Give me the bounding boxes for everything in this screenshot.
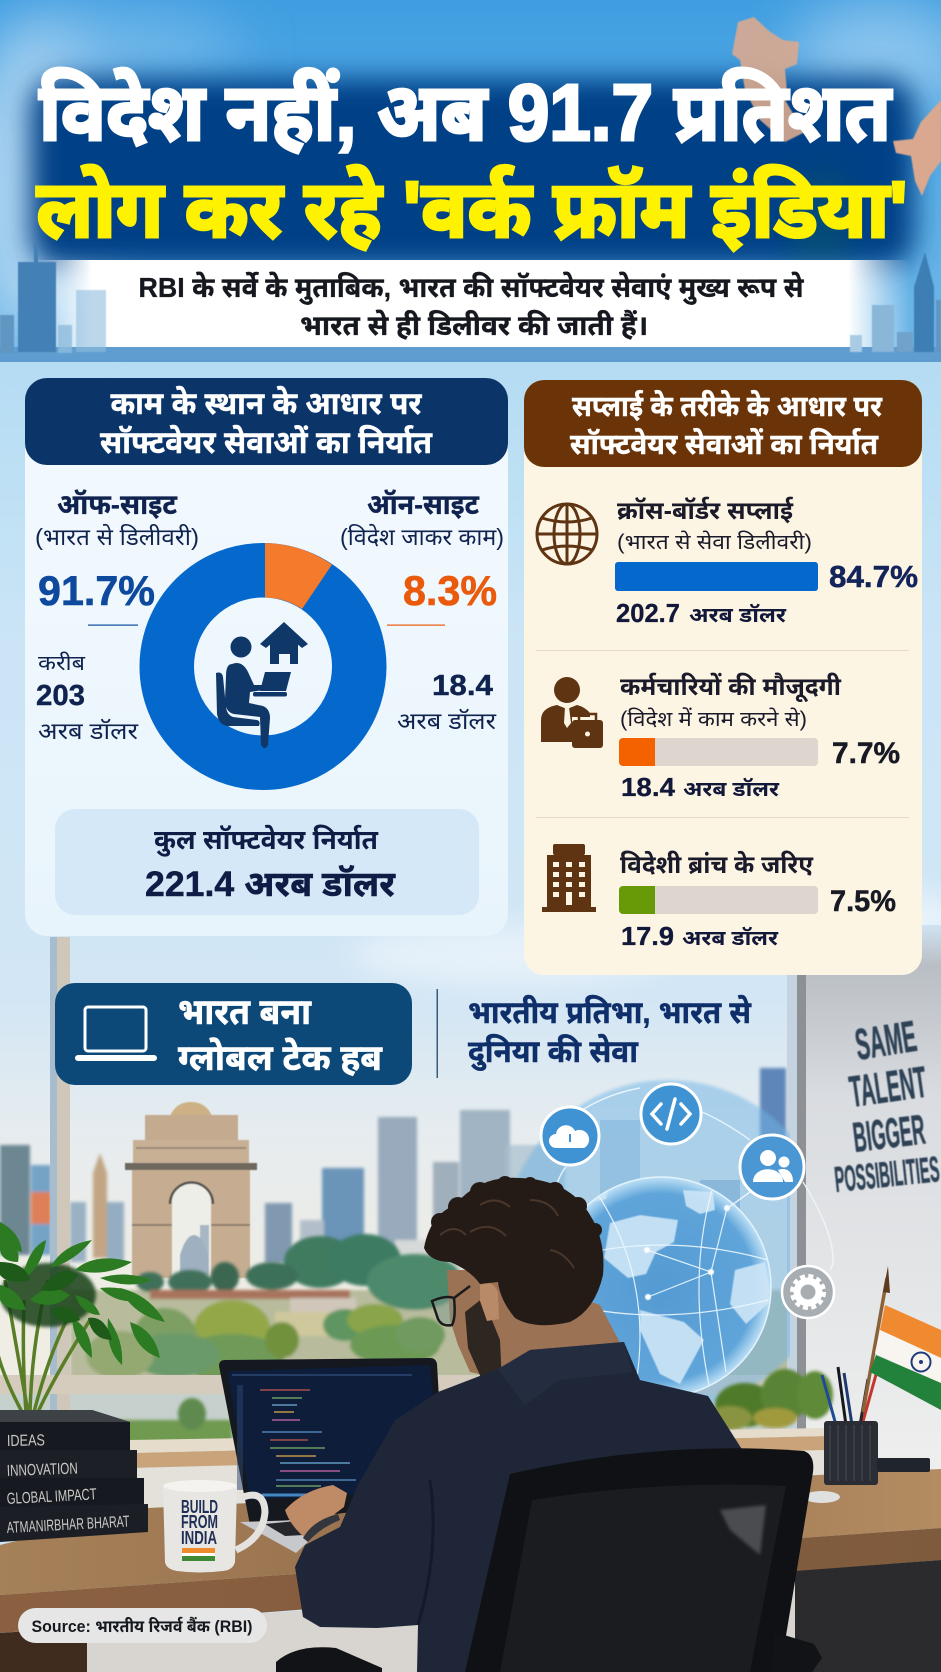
amount: [616, 598, 787, 628]
floating tech icons: [541, 1084, 834, 1318]
bar: [615, 562, 818, 591]
left panel heading: सॉफ्टवेयर सेवाओं का निर्यात: [100, 425, 433, 460]
icon: people: [740, 1135, 804, 1199]
title: लोग कर रहे 'वर्क फ्रॉम इंडिया': [36, 164, 908, 254]
hair: [424, 1176, 603, 1325]
distant buildings: [0, 1068, 786, 1273]
face and neck: [447, 1270, 625, 1384]
left panel heading: [25, 378, 508, 465]
row text: [617, 496, 812, 554]
bottom scene: outside view: [0, 1068, 800, 1444]
row text: (विदेश में काम करने से): [620, 707, 807, 731]
window sill: [130, 1428, 825, 1510]
amount: 17.9: [621, 921, 674, 951]
amount: 202.7: [616, 598, 680, 628]
icon: cloud: [541, 1107, 599, 1165]
trees and park: [70, 1234, 790, 1382]
background: lower sky: [0, 362, 941, 1402]
Indian flag: [863, 1266, 941, 1412]
amount: 18.4: [621, 772, 676, 802]
wall slogan: [833, 1012, 941, 1200]
India Gate: [125, 1102, 257, 1280]
bar: [619, 886, 818, 914]
tagline: दुनिया की सेवा: [468, 1034, 639, 1071]
sill plants: [708, 1369, 833, 1430]
offsite value: 203: [36, 680, 85, 712]
onsite label: [340, 488, 504, 550]
left skyline: [0, 243, 106, 353]
panel: supply mode: [524, 380, 922, 975]
badge text: ग्लोबल टेक हब: [178, 1036, 383, 1078]
offsite value: [36, 567, 155, 744]
row text: (भारत से सेवा डिलीवरी): [617, 530, 812, 554]
amount: अरब डॉलर: [689, 603, 787, 627]
bar: [619, 738, 818, 766]
right skyline: [850, 252, 941, 352]
icon: globe: [537, 504, 597, 564]
onsite value: 8.3%: [403, 567, 497, 614]
source pill: Source: भारतीय रिजर्व बैंक (RBI): [32, 1616, 252, 1636]
row: foreign branch: [542, 844, 896, 951]
total box: 221.4 अरब डॉलर: [145, 865, 396, 904]
desk gadget: [804, 1458, 930, 1503]
panel: work location: [25, 378, 508, 936]
map of India behind title: [732, 17, 941, 196]
right panel heading: सॉफ्टवेयर सेवाओं का निर्यात: [570, 427, 879, 461]
window frame: [0, 937, 806, 1470]
book stack: ATMANIRBHAR BHARAT: [6, 1514, 130, 1537]
subtitle text: भारत से ही डिलीवर की जाती हैं।: [300, 308, 648, 341]
onsite value: 18.4: [432, 670, 493, 702]
hand and watch: [285, 1485, 347, 1542]
tech hub badge: [55, 983, 412, 1085]
background: top sky with clouds: [0, 0, 941, 362]
right panel heading: [524, 380, 922, 467]
subtitle text: [138, 270, 805, 341]
book stack: INNOVATION: [7, 1461, 78, 1480]
onsite label: ऑन-साइट: [367, 488, 480, 520]
desk plant: [0, 1222, 165, 1412]
value: 84.7%: [829, 559, 918, 594]
person: [285, 1176, 790, 1672]
icon: businessman with briefcase: [541, 677, 603, 748]
value: 7.5%: [830, 885, 896, 918]
badge text: भारत बना: [178, 991, 312, 1032]
desk: [0, 1469, 941, 1672]
map lower part in title shade: [790, 172, 850, 262]
total box: [55, 809, 479, 915]
book stack: [0, 1410, 148, 1542]
row text: विदेशी ब्रांच के जरिए: [620, 850, 814, 879]
offsite label: (भारत से डिलीवरी): [35, 524, 199, 550]
glasses: [432, 1286, 470, 1325]
offsite value: करीब: [38, 651, 86, 675]
onsite value: अरब डॉलर: [397, 708, 497, 734]
pen cup: [822, 1367, 878, 1485]
subtitle text: RBI के सर्वे के मुताबिक, भारत की सॉफ्टवेयर सेवाएं मुख्य रूप से: [138, 270, 805, 305]
onsite label: (विदेश जाकर काम): [340, 524, 504, 550]
amount: अरब डॉलर: [683, 777, 780, 801]
icon: laptop: [78, 1007, 154, 1058]
coffee mug: INDIA: [181, 1528, 217, 1548]
offsite value: अरब डॉलर: [38, 718, 139, 744]
coffee mug: [163, 1480, 265, 1572]
source pill: [18, 1608, 267, 1643]
onsite value: [387, 567, 497, 734]
offsite label: ऑफ-साइट: [57, 488, 178, 520]
left panel heading: काम के स्थान के आधार पर: [110, 386, 423, 421]
offsite value: 91.7%: [38, 567, 155, 614]
icon: gear: [782, 1266, 834, 1318]
title dark glow: [30, 78, 915, 268]
tagline: भारतीय प्रतिभा, भारत से: [468, 995, 752, 1030]
tagline: [436, 989, 752, 1078]
row text: कर्मचारियों की मौजूदगी: [620, 672, 842, 703]
icon: office building: [542, 844, 596, 912]
office chair: [276, 1448, 822, 1672]
offsite label: [35, 488, 199, 550]
right panel heading: सप्लाई के तरीके के आधार पर: [572, 389, 883, 423]
total box: कुल सॉफ्टवेयर निर्यात: [154, 824, 379, 856]
row: employees: [541, 672, 900, 802]
coffee mug: BUILD: [181, 1497, 218, 1517]
laptop: [219, 1358, 445, 1553]
book stack: GLOBAL IMPACT: [6, 1486, 97, 1508]
value: 7.7%: [832, 737, 900, 770]
icon: code: [641, 1084, 701, 1144]
subtitle band: [0, 260, 941, 362]
book stack: IDEAS: [7, 1432, 45, 1450]
badge text: [178, 991, 383, 1078]
coffee mug: FROM: [181, 1512, 218, 1532]
donut chart: [167, 543, 359, 763]
hologram network globe: [503, 1080, 833, 1410]
row text: [620, 672, 842, 731]
shirt: [295, 1342, 790, 1672]
icon: remote worker at home: [216, 622, 308, 748]
wall: [806, 925, 941, 1500]
amount: [621, 772, 780, 802]
amount: अरब डॉलर: [682, 926, 779, 950]
row: cross-border: [537, 496, 918, 628]
amount: [621, 921, 779, 951]
title: [36, 67, 908, 254]
row text: क्रॉस-बॉर्डर सप्लाई: [617, 496, 794, 525]
title: विदेश नहीं, अब 91.7 प्रतिशत: [39, 67, 892, 157]
